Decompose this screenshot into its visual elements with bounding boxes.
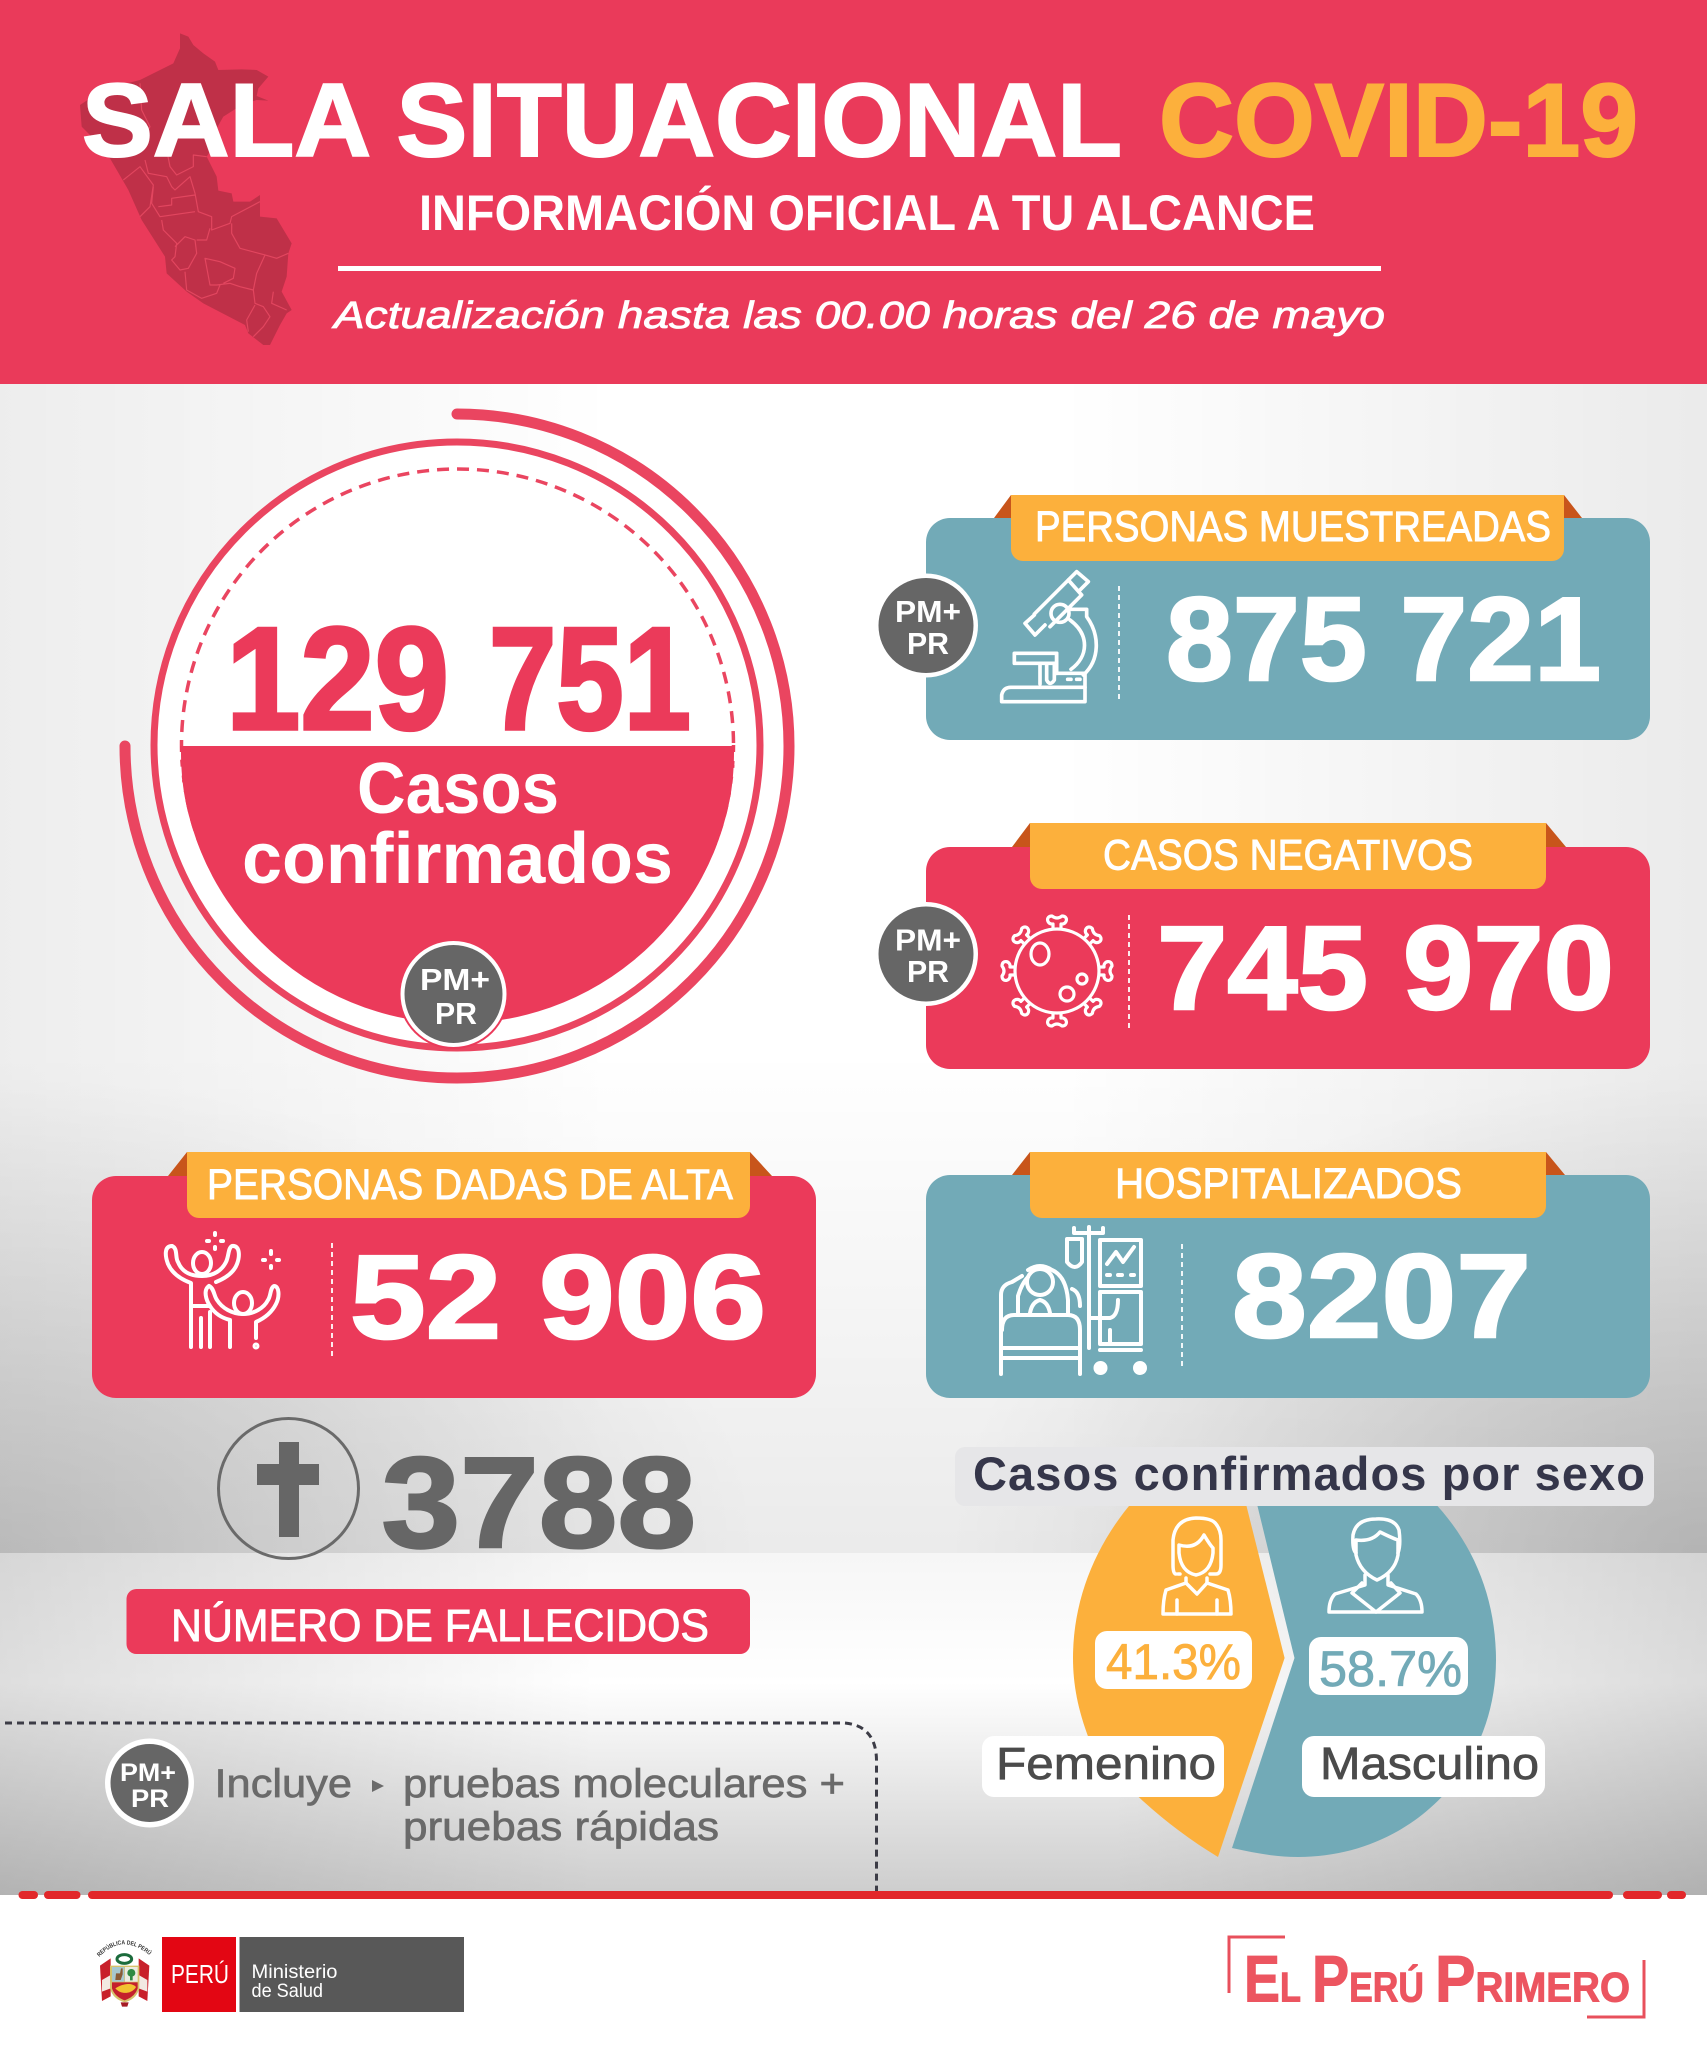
ministry block: de Salud — [252, 1981, 323, 2002]
value: 58.7%: 58.7% — [1319, 1641, 1462, 1697]
outer arc — [125, 414, 789, 1078]
pie slice: masculino — [1232, 1500, 1496, 1857]
footnote text: Incluye — [214, 1762, 352, 1806]
ribbon — [994, 495, 1582, 561]
divider — [1118, 586, 1120, 699]
label: casos confirmados: Casos — [357, 749, 559, 829]
ribbon — [1012, 1152, 1565, 1218]
ribbon — [168, 1152, 772, 1218]
label: masculino: Masculino — [1320, 1738, 1539, 1789]
badge: PM+PR — [874, 574, 978, 678]
icon: microscope — [1002, 572, 1096, 702]
half fill — [180, 746, 735, 1024]
PERÚ block — [162, 1937, 236, 2012]
ribbon: PERSONAS DADAS DE ALTA — [207, 1161, 733, 1209]
label: casos confirmados: confirmados — [242, 819, 673, 899]
label: femenino — [982, 1736, 1224, 1797]
badge: PM+PR — [105, 1738, 194, 1828]
badge: PM+PR: PR — [435, 996, 477, 1031]
pie slice: femenino — [1073, 1500, 1285, 1857]
label: femenino: Femenino — [996, 1738, 1216, 1789]
label: casos confirmados — [242, 749, 673, 899]
value: 745 970 — [1157, 902, 1614, 1035]
header rule — [338, 266, 1381, 271]
icon: man — [1329, 1519, 1422, 1612]
badge: PM+PR — [874, 902, 978, 1006]
divider — [331, 1243, 333, 1357]
case count: 129 — [226, 597, 449, 760]
title — [82, 63, 1638, 179]
title: SALA SITUACIONAL — [82, 63, 1122, 179]
panel: casos negativos — [874, 823, 1650, 1069]
badge: PM+PR: PM+ — [895, 594, 961, 629]
logo: el perú primero: PRIMERO — [1435, 1942, 1630, 2016]
ribbon: CASOS NEGATIVOS — [1103, 832, 1473, 880]
ribbon: HOSPITALIZADOS — [1115, 1160, 1462, 1208]
dotted frame — [5, 1723, 876, 1892]
badge: PM+PR: PR — [131, 1785, 169, 1813]
divider — [1181, 1244, 1183, 1366]
panel: confirmed cases — [125, 414, 789, 1078]
icon: cross in circle — [218, 1418, 358, 1558]
card — [926, 847, 1650, 1069]
header banner — [0, 0, 1707, 384]
panel: personas muestreadas — [874, 495, 1650, 740]
card — [926, 518, 1650, 740]
chart heading: Casos confirmados por sexo — [973, 1447, 1645, 1500]
icon: coat of arms: REPÚBLICA DEL PERÚ — [96, 1940, 152, 1957]
chart: cases by sex — [955, 1447, 1654, 1857]
icon: people celebrating — [166, 1233, 279, 1348]
title: COVID-19 — [1159, 63, 1638, 179]
footer bar — [18, 1891, 1686, 1899]
label: masculino — [1302, 1736, 1545, 1797]
value: 3788 — [382, 1431, 696, 1575]
update date: Actualización hasta las 00.00 horas del 26 de mayo — [332, 295, 1385, 337]
icon: virus — [1002, 916, 1112, 1026]
panel: personas dadas de alta — [92, 1152, 816, 1398]
case count — [226, 597, 691, 760]
badge: PM+PR — [398, 939, 508, 1049]
footnote text: pruebas rápidas — [403, 1805, 719, 1849]
logo: el perú primero: PERÚ — [1312, 1942, 1424, 2016]
panel: hospitalizados — [926, 1152, 1650, 1398]
ministry block: Ministerio — [252, 1962, 338, 1983]
badge: PM+PR: PR — [907, 626, 949, 661]
logo: el perú primero: EL — [1244, 1942, 1301, 2016]
card — [92, 1176, 816, 1398]
label: número de fallecidos: NÚMERO DE FALLECIDOS — [171, 1600, 709, 1651]
badge: PM+PR: PM+ — [420, 962, 490, 997]
value: 8207 — [1232, 1230, 1531, 1363]
value: 875 721 — [1166, 573, 1601, 706]
logo: ministerio de salud — [96, 1937, 464, 2012]
card — [926, 1175, 1650, 1398]
panel: fallecidos — [126, 1418, 750, 1654]
subtitle: INFORMACIÓN OFICIAL A TU ALCANCE — [419, 185, 1315, 241]
ribbon — [1012, 823, 1566, 889]
logo: el perú primero — [1229, 1937, 1644, 2017]
value: 52 906 — [350, 1231, 766, 1364]
value: 41.3%: 41.3% — [1106, 1634, 1241, 1690]
badge: PM+PR: PM+ — [120, 1759, 176, 1787]
divider — [1128, 915, 1130, 1028]
badge: PM+PR: PR — [907, 954, 949, 989]
icon: coat of arms — [96, 1940, 152, 2007]
serrated edge — [180, 752, 735, 1030]
dashed ring — [182, 469, 734, 1021]
inner ring — [154, 442, 760, 1048]
badge: PM+PR: PM+ — [895, 922, 961, 958]
ribbon: PERSONAS MUESTREADAS — [1035, 503, 1551, 551]
case count: 751 — [489, 597, 691, 760]
footnote text — [214, 1762, 845, 1849]
panel: footnote — [5, 1723, 876, 1892]
PERÚ block: PERÚ — [171, 1959, 229, 1989]
icon: woman — [1163, 1518, 1231, 1614]
footnote text: pruebas moleculares + — [403, 1762, 845, 1806]
map of Peru — [80, 33, 292, 345]
ministry block — [240, 1937, 464, 2012]
icon: hospital bed and monitor — [1001, 1227, 1145, 1374]
